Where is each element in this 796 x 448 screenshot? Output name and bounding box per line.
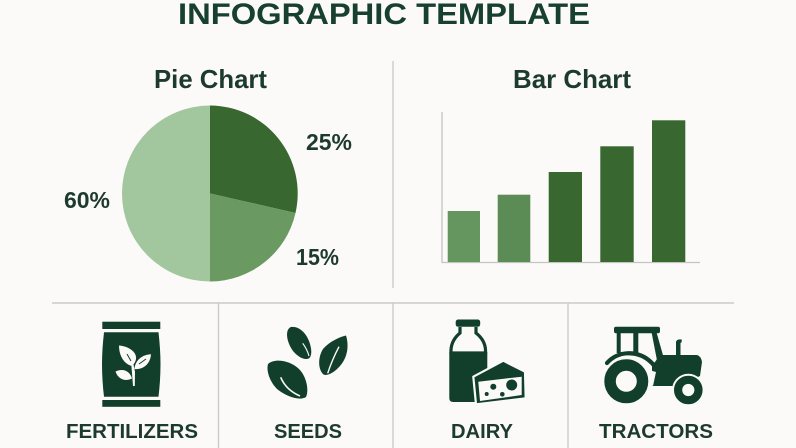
label: tractors: TRACTORS (599, 420, 713, 443)
pie chart heading: Pie Chart (154, 64, 267, 94)
icon: fertilizer bag (102, 322, 160, 407)
icon: tractor (607, 327, 705, 406)
label: 25%: 25% (306, 129, 352, 155)
label: 60%: 60% (64, 187, 110, 213)
panel: dairy (449, 320, 526, 443)
label: fertilizers: FERTILIZERS (66, 420, 198, 443)
panel: fertilizers (66, 322, 198, 443)
panel: bar chart (442, 64, 700, 262)
bar chart heading: Bar Chart (513, 64, 631, 94)
bar chart (442, 112, 700, 262)
icon: seeds (267, 327, 348, 399)
label: dairy: DAIRY (451, 420, 513, 443)
label: 15%: 15% (296, 244, 339, 270)
panel: seeds (267, 327, 348, 443)
label: seeds: SEEDS (274, 420, 342, 443)
panel: tractors (599, 327, 713, 443)
pie chart (122, 106, 298, 282)
icon: milk bottle and cheese (449, 320, 526, 404)
panel: pie chart (64, 64, 352, 282)
